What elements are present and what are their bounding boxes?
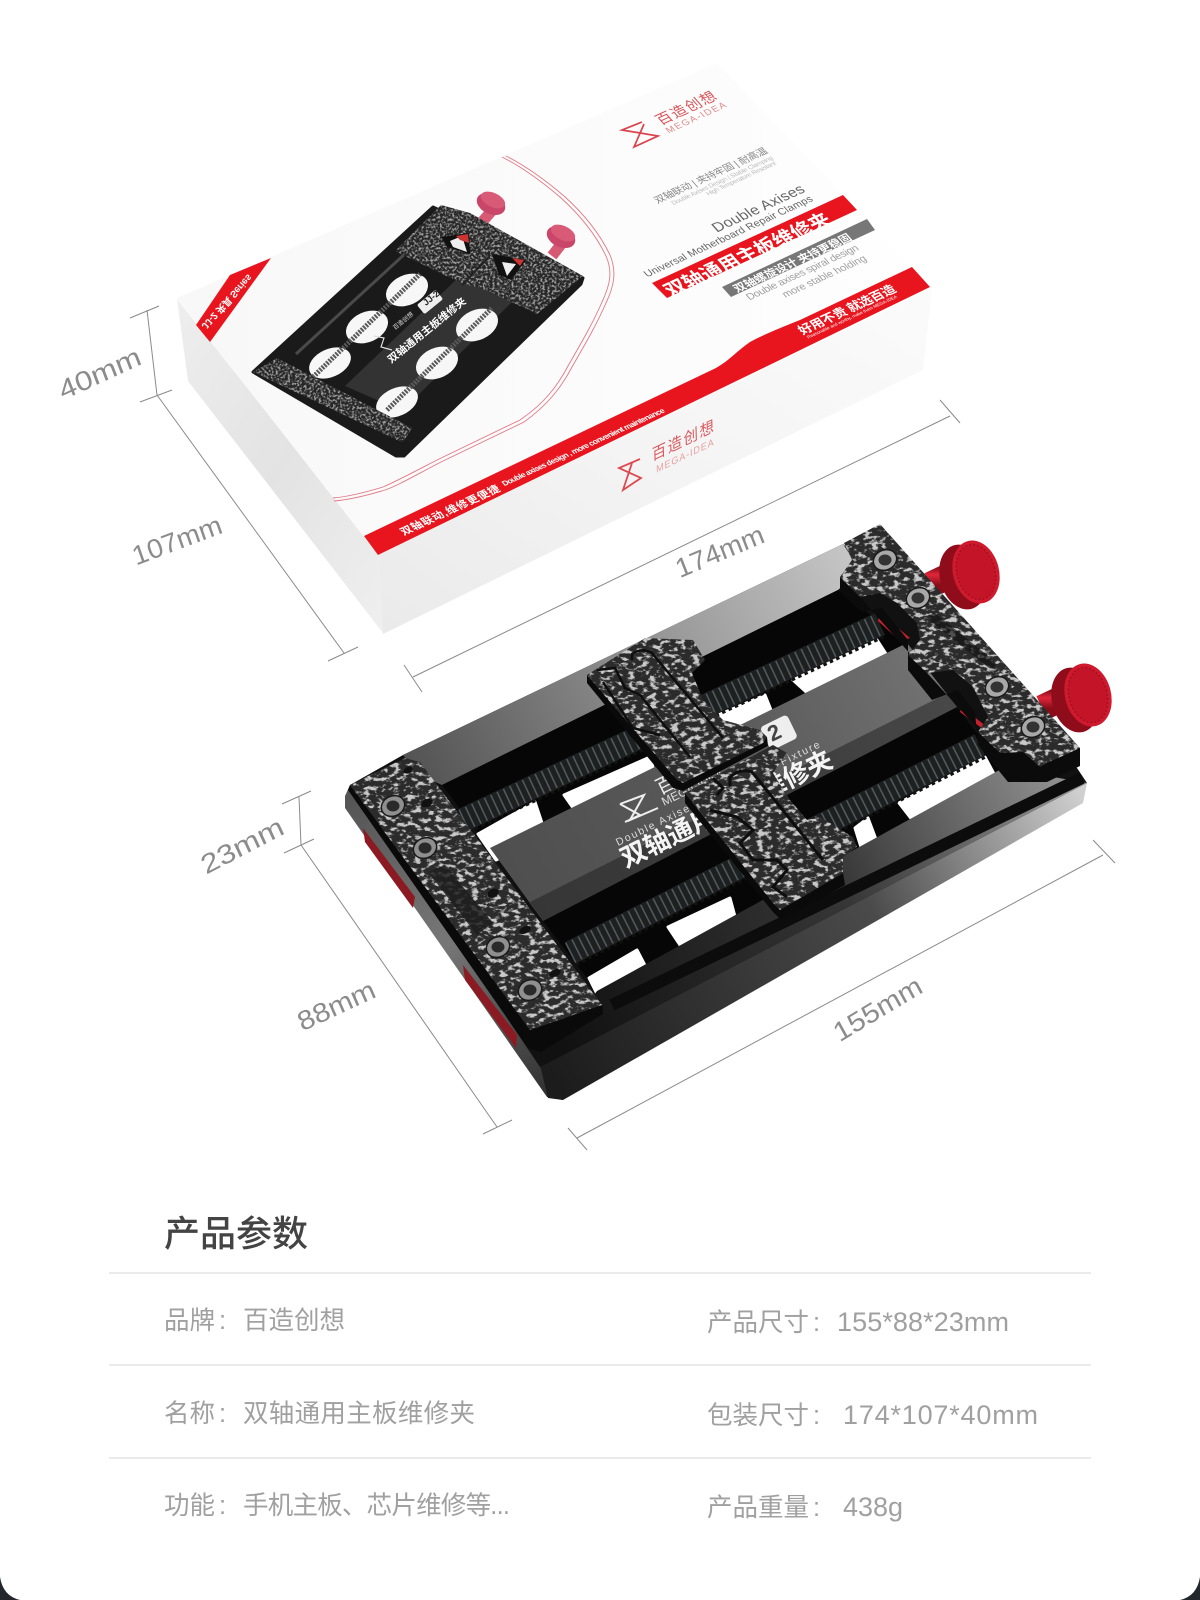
- center plate print: MEGA-IDEA: [659, 766, 726, 809]
- corner tag text: JJ-2 夹具 Series: [199, 271, 256, 332]
- parameter: product size: 产品尺寸: [707, 1309, 809, 1337]
- printed screws: [313, 274, 492, 410]
- box height line: [130, 306, 172, 402]
- parameter: product size: :: [813, 1309, 820, 1337]
- lower threaded rod: [570, 745, 983, 959]
- parameter: product size: 155*88*23mm: [837, 1307, 1009, 1337]
- parameters section: [109, 1213, 1091, 1522]
- center plate print: 双轴通用主板维修夹: [615, 744, 837, 873]
- stripe slogan: Reasonable and worthy, make them MEGA-IDEA: [806, 294, 898, 339]
- lower red knob: [1042, 658, 1118, 738]
- upper middle clamp: [587, 638, 768, 791]
- right carbon bar: [840, 524, 1080, 782]
- label 40mm: 40mm: [54, 341, 145, 406]
- right bar screws: [870, 546, 1048, 741]
- lid logo: [622, 89, 730, 147]
- box front face: [378, 288, 932, 634]
- label 174mm: 174mm: [671, 519, 768, 584]
- parameter: brand: 百造创想: [243, 1307, 345, 1335]
- base top surface: [350, 544, 1087, 1067]
- base left side: [345, 785, 563, 1100]
- corner: bottom left: [0, 1577, 20, 1600]
- parameter: function: 功能: [164, 1492, 215, 1520]
- front face logo: MEGA-IDEA: [656, 437, 714, 476]
- box depth line: [157, 395, 358, 661]
- lid gray subtitle bar: [722, 219, 875, 297]
- clamp depth line: [301, 845, 512, 1134]
- left bar slot: [428, 865, 493, 935]
- lid heading text: Universal Motherboard Repair Clamps: [641, 194, 816, 280]
- corner: bottom right: [1180, 1577, 1200, 1600]
- printed plate label: 百造创想: [391, 310, 415, 332]
- white slots: [478, 640, 1000, 1000]
- label 88mm: 88mm: [293, 975, 380, 1037]
- lid heading text: Double Axises: [708, 182, 809, 236]
- upper rail: [403, 544, 860, 785]
- lower clamp surface: [685, 745, 857, 910]
- rail ridge: [612, 778, 1082, 1005]
- center plate print: 2: [763, 719, 785, 746]
- label 23mm: 23mm: [196, 812, 288, 880]
- center plate print: 百造创想: [652, 744, 734, 799]
- feature small text: 双轴联动 | 夹持牢固 | 耐高温: [651, 145, 770, 206]
- center plate: [490, 643, 957, 921]
- printed lower carbon bar: [253, 358, 412, 442]
- upper threaded rod: [463, 624, 883, 826]
- parameter: weight: :: [813, 1494, 820, 1522]
- parameter: name: :: [219, 1400, 226, 1428]
- parameter: brand: 品牌: [164, 1307, 215, 1335]
- box left side face: [177, 299, 383, 633]
- red wave stripe along lid edge: [364, 267, 930, 555]
- lower middle clamp: [685, 745, 857, 920]
- upper clamp thickness: [587, 675, 768, 791]
- parameter: function: 手机主板、芯片维修等...: [243, 1492, 510, 1520]
- stripe caption: Double axises design , more convenient maintenance: [500, 406, 667, 488]
- clamp width line: [568, 840, 1115, 1150]
- lower window: [543, 707, 1003, 991]
- corner tag: [196, 258, 271, 342]
- upper window: [442, 590, 907, 848]
- parameter: name: 名称: [164, 1400, 215, 1428]
- upper clamp grooves: [597, 650, 723, 757]
- printed upper carbon bar: [395, 205, 583, 314]
- base right side: [540, 783, 1087, 1100]
- right bar thickness: [840, 577, 1080, 782]
- parameter: weight: 产品重量: [707, 1494, 809, 1522]
- product box: [177, 63, 932, 634]
- printed clamp image on lid: [253, 188, 583, 456]
- center plate shade: [530, 693, 957, 921]
- parameters heading: 产品参数: [164, 1213, 308, 1254]
- label 107mm: 107mm: [128, 510, 226, 571]
- lid logo: 百造创想: [652, 89, 721, 128]
- center plate print: Double Axises Phone Repair Fixture: [614, 739, 822, 849]
- printed cut-outs: [441, 233, 526, 285]
- lid red title bar: 双轴通用主板维修夹: [659, 209, 836, 301]
- box top face: [177, 63, 932, 555]
- red outline on box lid: [333, 156, 614, 501]
- parameter: weight: 438g: [843, 1492, 903, 1522]
- dividers: [109, 1272, 1091, 1459]
- printed slots: [304, 267, 503, 424]
- upper clamp surface: [587, 638, 767, 783]
- left carbon bar: [348, 758, 603, 1052]
- left bar thickness: [348, 785, 603, 1052]
- right bar slot: [934, 618, 991, 664]
- upper red knob: [930, 535, 1006, 615]
- lid logo: MEGA-IDEA: [664, 100, 730, 136]
- printed knobs: [473, 188, 579, 256]
- label 155mm: 155mm: [828, 971, 927, 1048]
- knobs: [930, 535, 1118, 738]
- box width line: [404, 400, 960, 692]
- parameter: package size: 包装尺寸: [707, 1402, 809, 1430]
- left bar holes: [402, 765, 562, 979]
- right bar surface: [840, 524, 1080, 767]
- lower rail: [540, 768, 1087, 1067]
- clamp height line: [282, 791, 314, 853]
- printed plate label: 双轴通用主板维修夹: [385, 294, 469, 366]
- parameter: brand: :: [219, 1307, 226, 1335]
- lid description: more stable holding: [780, 253, 870, 300]
- left bar screws: [378, 792, 545, 1004]
- red side inserts: [363, 828, 517, 1048]
- lid gray subtitle bar: 双轴螺旋设计 夹持更稳固: [730, 231, 855, 295]
- lower clamp thickness: [685, 793, 845, 920]
- printed plate: [253, 207, 583, 456]
- printed plate label: JJ-2: [421, 288, 441, 308]
- repair clamp product: [345, 524, 1118, 1100]
- front face logo: 百造创想: [652, 417, 714, 465]
- lower clamp grooves: [710, 771, 823, 897]
- dimension lines: [130, 306, 1115, 1150]
- parameter: function: :: [219, 1492, 226, 1520]
- stripe caption: 双轴联动,维修更便捷: [397, 482, 503, 538]
- front face logo: [619, 417, 714, 490]
- feature small text: High Temperature Resistant: [705, 160, 778, 197]
- lid description: Double axises spiral design: [744, 243, 862, 303]
- stripe caption: [397, 406, 667, 538]
- stripe slogan: 好用不贵 就选百造: [795, 282, 899, 337]
- feature small text: Double Axises Design | Stable Clamping: [670, 155, 775, 207]
- left bar surface: [350, 758, 602, 1030]
- dimension labels: [54, 341, 927, 1048]
- red inner pieces: [878, 613, 987, 729]
- parameter: name: 双轴通用主板维修夹: [243, 1400, 475, 1428]
- parameter: package size: 174*107*40mm: [843, 1400, 1038, 1430]
- parameter: package size: :: [813, 1402, 820, 1430]
